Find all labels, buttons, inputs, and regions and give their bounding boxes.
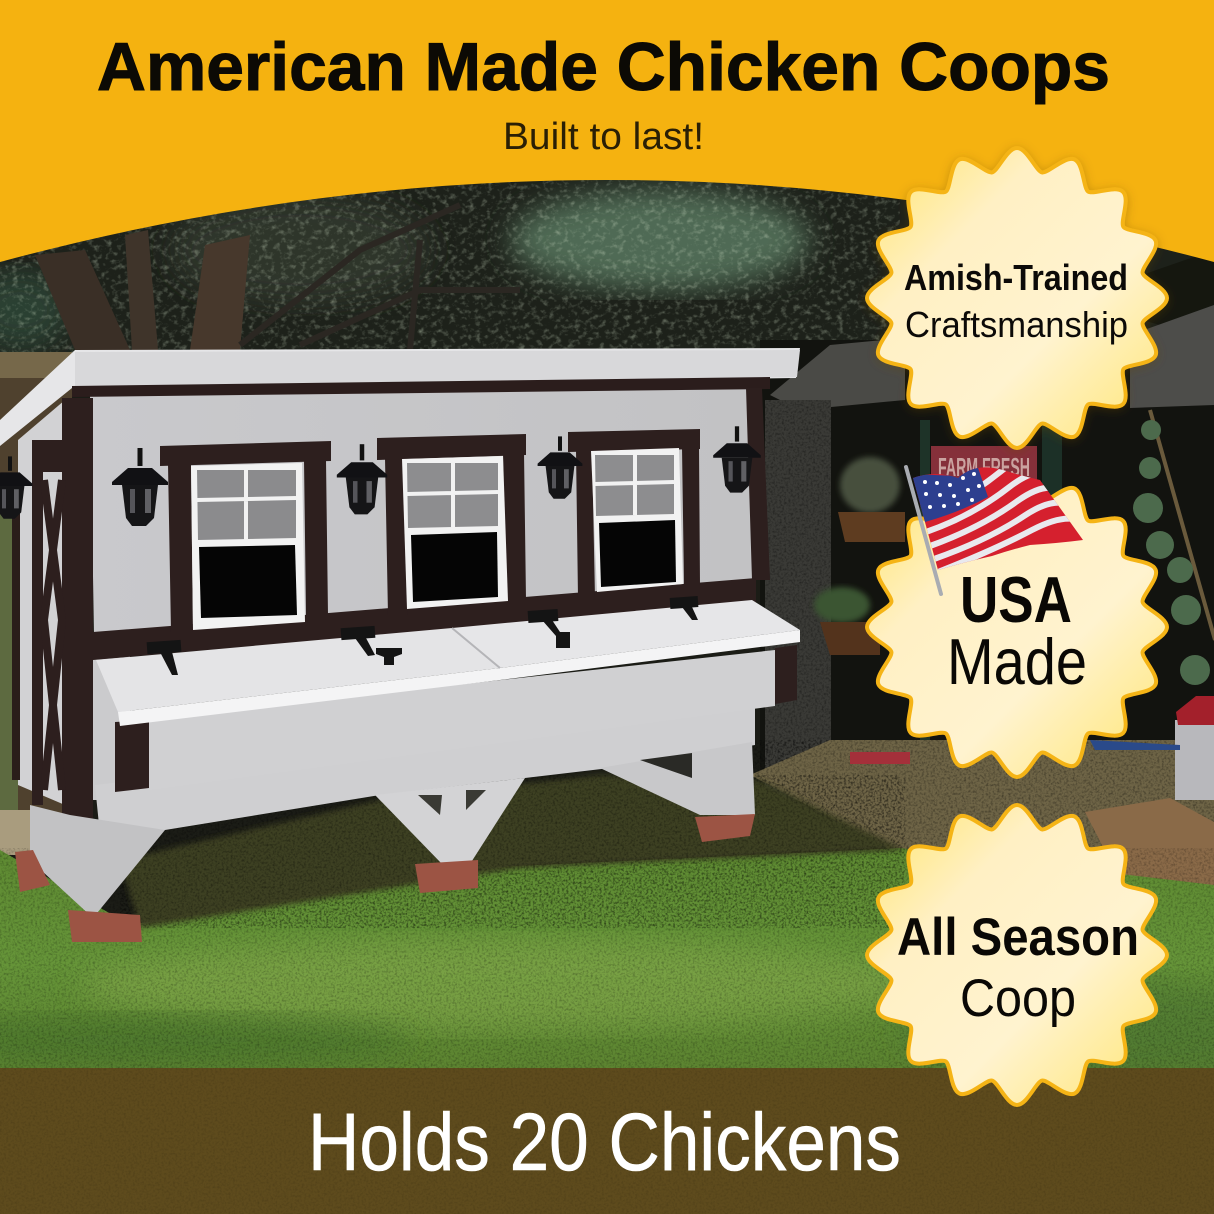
badge text regular: Coop (960, 969, 1076, 1028)
window 3 (568, 429, 700, 598)
badge: Amish-Trained Craftsmanship (867, 148, 1167, 448)
lower wall trim (93, 578, 756, 660)
nest box (96, 600, 800, 792)
corner post and door (12, 388, 770, 836)
wire base legs (30, 708, 755, 918)
roof (0, 348, 800, 446)
badge text bold: USA (960, 563, 1072, 636)
badge text bold: Amish-Trained (904, 257, 1128, 298)
left fence (0, 352, 72, 855)
window 2 (377, 434, 526, 615)
planters (814, 457, 905, 655)
coop front wall (90, 386, 756, 636)
title: American Made Chicken Coops (97, 29, 1110, 105)
farm sign (931, 446, 1037, 484)
farm sign: FARM FRESH (938, 452, 1030, 482)
badge text regular: Made (947, 625, 1087, 698)
lower body behind nest box (93, 650, 130, 800)
subtitle: Built to last! (503, 116, 704, 158)
coop side wall (18, 400, 65, 805)
badge text bold: All Season (897, 908, 1139, 967)
top yellow header (0, 0, 1214, 262)
right dark enclosure (750, 250, 1214, 900)
lanterns (0, 426, 761, 526)
climbing vine (1133, 410, 1214, 685)
lawn (0, 848, 1214, 1080)
icon: american flag (900, 457, 1090, 594)
badge: USA Made (867, 477, 1167, 777)
bricks (15, 814, 755, 942)
footer capacity text: Holds 20 Chickens (308, 1097, 901, 1188)
badge text regular: Craftsmanship (905, 304, 1128, 345)
badge: All Season Coop (867, 805, 1167, 1105)
lid latches and handles (147, 596, 698, 675)
tree canopy (0, 170, 1214, 360)
shaded ground under coop (120, 775, 905, 928)
bottom band (0, 1068, 1214, 1214)
window 1 (160, 441, 331, 632)
chicken coop (0, 348, 800, 942)
